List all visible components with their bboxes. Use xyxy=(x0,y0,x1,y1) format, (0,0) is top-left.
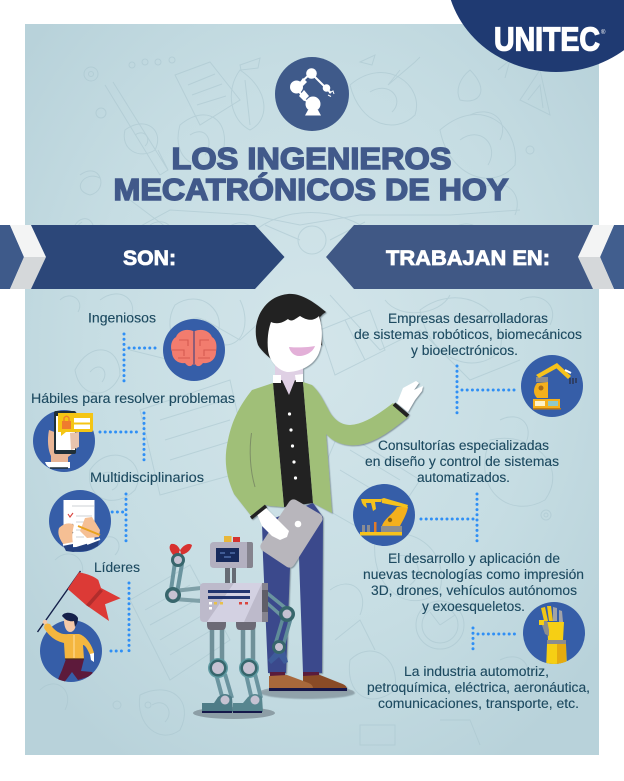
item: El desarrollo y aplicación xyxy=(363,551,585,670)
banner: TRABAJAN EN xyxy=(326,225,624,289)
torso xyxy=(200,583,268,622)
item: El desarrollo y aplicación: nuevas tecnologías como impresión xyxy=(363,567,584,582)
item: Multidisciplinarios: Multidisciplinarios xyxy=(90,470,204,485)
title: MECATRÓNICOS DE HOY xyxy=(114,171,508,207)
item: La industria automotriz: La industria automotriz, xyxy=(404,664,549,679)
smile xyxy=(289,346,315,356)
icon: document and hands xyxy=(58,500,100,552)
collar xyxy=(273,374,303,383)
jacket right xyxy=(303,382,408,513)
logo: UNITEC: UNITEC xyxy=(494,20,600,58)
item: Empresas desarrolladoras: y bioelectrónicos. xyxy=(411,343,518,358)
banner: TRABAJAN EN: TRABAJAN EN: xyxy=(386,247,550,270)
item: Consultorías especializadas: automatizados. xyxy=(417,470,510,485)
man illustration xyxy=(226,294,423,698)
icon: robot arm on console xyxy=(533,363,576,410)
banner: SON xyxy=(0,225,284,289)
item: El desarrollo y aplicación: El desarrollo y aplicación de xyxy=(388,551,560,566)
left arm xyxy=(165,544,201,603)
tablet xyxy=(260,499,323,568)
neck xyxy=(225,568,236,584)
icon: phone with padlock xyxy=(45,411,93,468)
item: La industria automotriz xyxy=(367,664,590,711)
item: La industria automotriz: petroquímica, eléctrica, aeronáutica, xyxy=(367,680,590,695)
item: Empresas desarrolladoras xyxy=(354,311,583,417)
feet xyxy=(202,694,263,713)
ear xyxy=(262,336,270,350)
banner: SON: SON: xyxy=(123,247,176,270)
icon: robotic gauntlet xyxy=(539,606,567,670)
item: La industria automotriz: comunicaciones, transporte, etc. xyxy=(378,696,579,711)
robot shadow xyxy=(193,707,275,719)
shoe shadow xyxy=(260,686,354,698)
right hand xyxy=(397,381,423,412)
robot illustration xyxy=(165,536,295,719)
item: El desarrollo y aplicación: 3D, drones, vehículos autónomos xyxy=(371,583,577,598)
right cuff xyxy=(394,404,408,416)
buttons xyxy=(288,412,297,480)
item: Consultorías especializadas xyxy=(353,438,559,546)
head xyxy=(210,536,253,568)
icon: brain xyxy=(171,330,217,366)
left cuff xyxy=(251,506,266,518)
item: Multidisciplinarios xyxy=(49,470,204,552)
item: Consultorías especializadas: en diseño y control de sistemas xyxy=(365,454,559,469)
icon: industrial robot arm xyxy=(360,498,408,536)
item: Consultorías especializadas: Consultorías especializadas xyxy=(378,438,549,453)
item: Ingeniosos xyxy=(88,310,225,384)
hand on tablet xyxy=(257,508,289,540)
trousers xyxy=(262,503,323,673)
shirt xyxy=(273,380,313,507)
logo: UNITEC: ® xyxy=(601,29,606,36)
title: LOS INGENIEROS xyxy=(172,142,452,176)
icon: leader person xyxy=(43,613,94,684)
logo: UNITEC xyxy=(446,0,624,72)
item: Líderes: Líderes xyxy=(94,560,140,575)
item: Líderes xyxy=(38,560,140,684)
item: Ingeniosos: Ingeniosos xyxy=(88,310,156,326)
hair xyxy=(256,294,326,362)
socks and shoes xyxy=(269,672,347,691)
item: El desarrollo y aplicación: y exoesqueletos. xyxy=(422,599,525,614)
right arm xyxy=(267,593,295,664)
icon: robot arm badge xyxy=(275,57,349,131)
face xyxy=(268,316,322,372)
jacket left xyxy=(226,383,284,517)
item: Hábiles para resolver problemas xyxy=(31,391,235,472)
neck xyxy=(275,365,303,395)
item: Hábiles para resolver problemas: Hábiles para resolver problemas xyxy=(31,391,235,406)
icon: flag xyxy=(38,571,121,632)
item: Empresas desarrolladoras: Empresas desarrolladoras xyxy=(388,311,548,326)
item: Empresas desarrolladoras: de sistemas robóticos, biomecánicos xyxy=(354,327,582,342)
title xyxy=(114,142,508,207)
legs xyxy=(207,622,261,700)
